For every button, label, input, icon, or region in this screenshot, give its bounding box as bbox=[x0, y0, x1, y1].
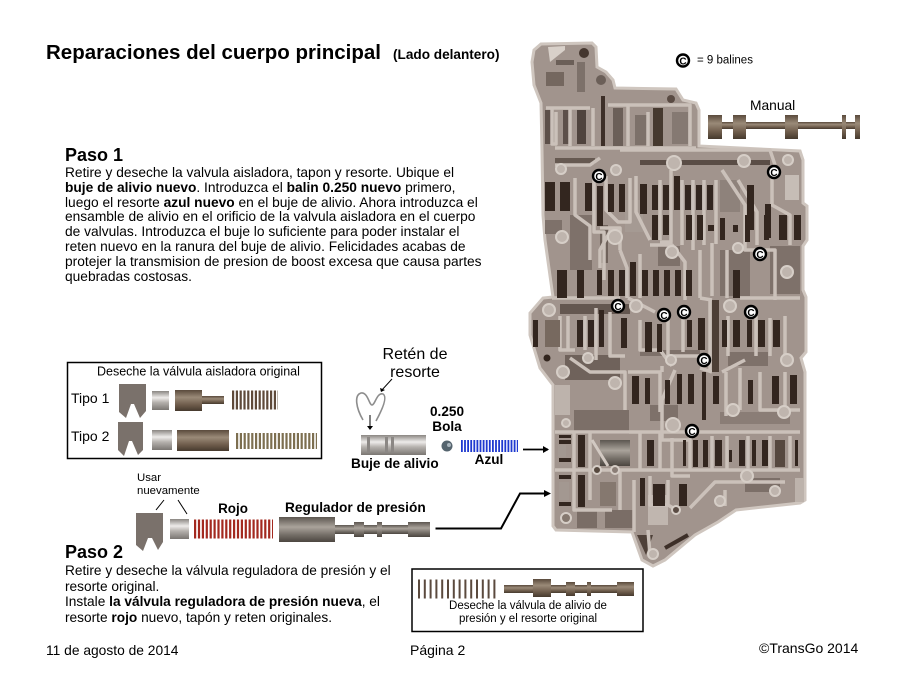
valve body bbox=[530, 43, 807, 566]
grey bores bbox=[558, 440, 630, 506]
grey chambers bbox=[545, 158, 804, 555]
text block: Paso 2: Instale la válvula reguladora de presión nueva, el bbox=[65, 594, 380, 609]
text block: Paso 1: de valvulas. Introduzca el buje lo suficiente para poder instalar el bbox=[65, 224, 459, 239]
text block: Paso 1: ensamble de alivio en el orificio de la valvula aisladora en el cuerpo bbox=[65, 209, 476, 224]
relief bushing: Buje de alivio bbox=[351, 456, 439, 471]
text block: Paso 1 bbox=[65, 145, 482, 284]
text block: Paso 2: Retire y deseche la válvula reguladora de presión y el bbox=[65, 563, 391, 578]
blue spring bbox=[461, 446, 518, 467]
check ball markers: C bbox=[688, 427, 696, 438]
sleeve bbox=[170, 519, 189, 539]
text block: Paso 1: buje de alivio nuevo. Introduzca el balin 0.250 nuevo primero, bbox=[65, 180, 456, 195]
text block: Paso 1: Retire y deseche la valvula aisladora, tapon y resorte. Ubique el bbox=[65, 165, 454, 180]
check ball markers: C bbox=[756, 250, 764, 261]
bosses bbox=[543, 155, 793, 559]
upper chamber bbox=[545, 46, 688, 146]
type 1 row bbox=[71, 384, 278, 418]
check ball markers: C bbox=[680, 308, 688, 319]
body outline bbox=[530, 43, 807, 566]
panel: discard pressure relief valve bbox=[412, 569, 643, 632]
ball: Bola bbox=[432, 419, 462, 434]
ball: 0.250 bbox=[430, 404, 464, 419]
panel: discard isolator valve: Deseche la válvula aisladora original bbox=[97, 364, 300, 378]
text block: Paso 1: quebradas costosas. bbox=[65, 269, 192, 284]
text block: Paso 2: resorte original. bbox=[65, 579, 159, 594]
panel: discard isolator valve bbox=[68, 362, 322, 458]
retainer label: Retén de bbox=[383, 346, 448, 363]
check ball markers: C bbox=[747, 308, 755, 319]
legend: 9 check balls: C bbox=[679, 56, 687, 68]
red spring: Rojo bbox=[218, 501, 248, 516]
pressure regulator bbox=[279, 500, 430, 542]
blue spring: Azul bbox=[475, 452, 503, 467]
title: Reparaciones del cuerpo principal bbox=[46, 41, 381, 64]
text block: Paso 1: luego el resorte azul nuevo en el buje de alivio. Ahora introduzca el bbox=[65, 195, 478, 210]
relief bushing bbox=[351, 435, 439, 471]
panel: discard pressure relief valve: presión y el resorte original bbox=[459, 613, 597, 625]
text block: Paso 1: Paso 1 bbox=[65, 145, 123, 165]
footer: page number: Página 2 bbox=[410, 642, 465, 658]
panel: discard pressure relief valve: Deseche la válvula de alivio de bbox=[449, 600, 607, 612]
text block: Paso 2: Paso 2 bbox=[65, 542, 123, 562]
legend: 9 check balls: = 9 balines bbox=[697, 54, 753, 66]
reuse label: Usar bbox=[137, 472, 161, 484]
footer: copyright: ©TransGo 2014 bbox=[759, 640, 859, 656]
manual valve: Manual bbox=[750, 98, 795, 113]
icon: retainer clip bbox=[357, 379, 392, 430]
text block: Paso 2: resorte rojo nuevo, tapón y reten originales. bbox=[65, 610, 332, 625]
new relief parts bbox=[351, 346, 518, 471]
dark channels lower bbox=[533, 300, 798, 548]
type 1 row: Tipo 1 bbox=[71, 390, 110, 406]
pressure regulator: Regulador de presión bbox=[285, 500, 426, 515]
check ball markers bbox=[593, 166, 780, 438]
manual valve bbox=[708, 98, 860, 139]
title: (Lado delantero) bbox=[393, 47, 500, 62]
arrow: relief to valve body bbox=[523, 446, 549, 453]
check ball markers: C bbox=[770, 168, 778, 179]
check ball markers: C bbox=[614, 302, 622, 313]
type 2 row bbox=[71, 422, 317, 456]
ball bbox=[430, 404, 464, 452]
light ribs bbox=[546, 105, 800, 555]
plug bbox=[136, 513, 163, 551]
arrow: regulator to valve body bbox=[436, 490, 551, 528]
text block: Paso 1: reten nuevo en la ranura del buje de alivio. Felicidades acabas de bbox=[65, 239, 466, 254]
text block: Paso 1: protejer la transmision de presion de boost excesa que causa partes bbox=[65, 254, 482, 269]
check ball markers: C bbox=[660, 311, 668, 322]
check ball markers: C bbox=[595, 172, 603, 183]
text block: Paso 2 bbox=[65, 542, 391, 625]
footer: date: 11 de agosto de 2014 bbox=[46, 643, 179, 658]
new regulator parts: nuevamente bbox=[137, 485, 200, 497]
legend: 9 check balls bbox=[677, 54, 753, 68]
new relief parts: resorte bbox=[390, 364, 440, 381]
type 2 row: Tipo 2 bbox=[71, 428, 110, 444]
check ball markers: C bbox=[700, 356, 708, 367]
dark channels upper bbox=[545, 176, 801, 298]
red spring bbox=[194, 501, 273, 529]
new regulator parts bbox=[136, 472, 430, 551]
